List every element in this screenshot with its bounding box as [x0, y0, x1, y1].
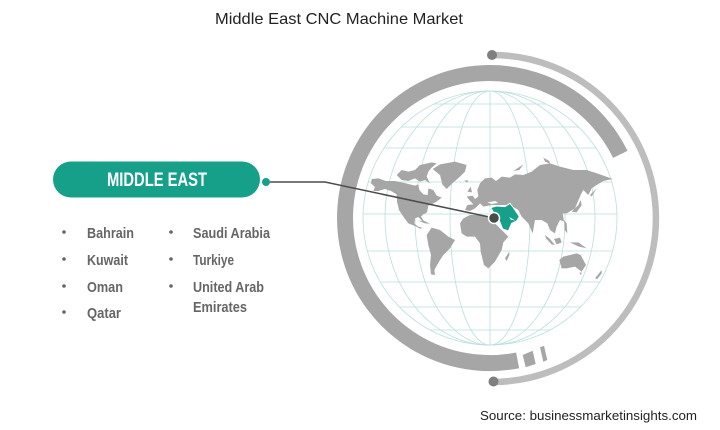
- title: Middle East CNC Machine Market: [215, 11, 464, 28]
- source: Source: businessmarketinsights.com: [480, 408, 697, 423]
- country list column 2: Turkiye: [193, 252, 234, 269]
- arc end dots: [487, 50, 498, 386]
- region pill: MIDDLE EAST: [107, 170, 207, 191]
- connector dot: [262, 178, 270, 186]
- Caribbean: [418, 221, 430, 224]
- thick outer ring: [345, 73, 620, 363]
- country list column 1: [62, 225, 134, 322]
- world map: Old World: [460, 158, 613, 279]
- Middle East highlight: [491, 203, 519, 231]
- Africa: [460, 215, 508, 268]
- Black Sea: [487, 201, 498, 204]
- country list column 2: Saudi Arabia: [193, 225, 271, 242]
- Japan: [572, 188, 597, 212]
- Tasmania and New Zealand: [579, 270, 602, 279]
- country list column 2: United Arab: [193, 279, 264, 296]
- country list column 1: Oman: [87, 279, 123, 296]
- South America: [427, 228, 455, 275]
- country list column 1: Kuwait: [87, 252, 128, 269]
- location marker: [488, 212, 500, 224]
- Madagascar: [505, 252, 509, 261]
- country list column 1: Bahrain: [87, 225, 134, 242]
- Southeast Asia islands: [545, 220, 587, 248]
- Eurasia: [465, 163, 613, 233]
- region pill: [53, 162, 260, 198]
- North America: [371, 178, 442, 229]
- world map: Americas: [371, 162, 468, 275]
- Persian Gulf: [509, 217, 515, 221]
- Arctic Russia islands: [513, 158, 550, 171]
- country list column 2: [169, 225, 271, 316]
- connector line: [270, 182, 494, 218]
- Arctic islands: [397, 162, 437, 183]
- ring end blocks: [523, 346, 547, 367]
- country list column 1: Qatar: [87, 305, 121, 322]
- UK: [467, 187, 472, 192]
- Greenland: [433, 162, 467, 189]
- thin outer arc: [492, 55, 656, 382]
- globe graphic: [270, 50, 656, 386]
- Iceland: [464, 180, 468, 183]
- country list column 2: Emirates: [193, 299, 247, 316]
- Australia: [559, 253, 586, 272]
- globe grid: [360, 91, 620, 345]
